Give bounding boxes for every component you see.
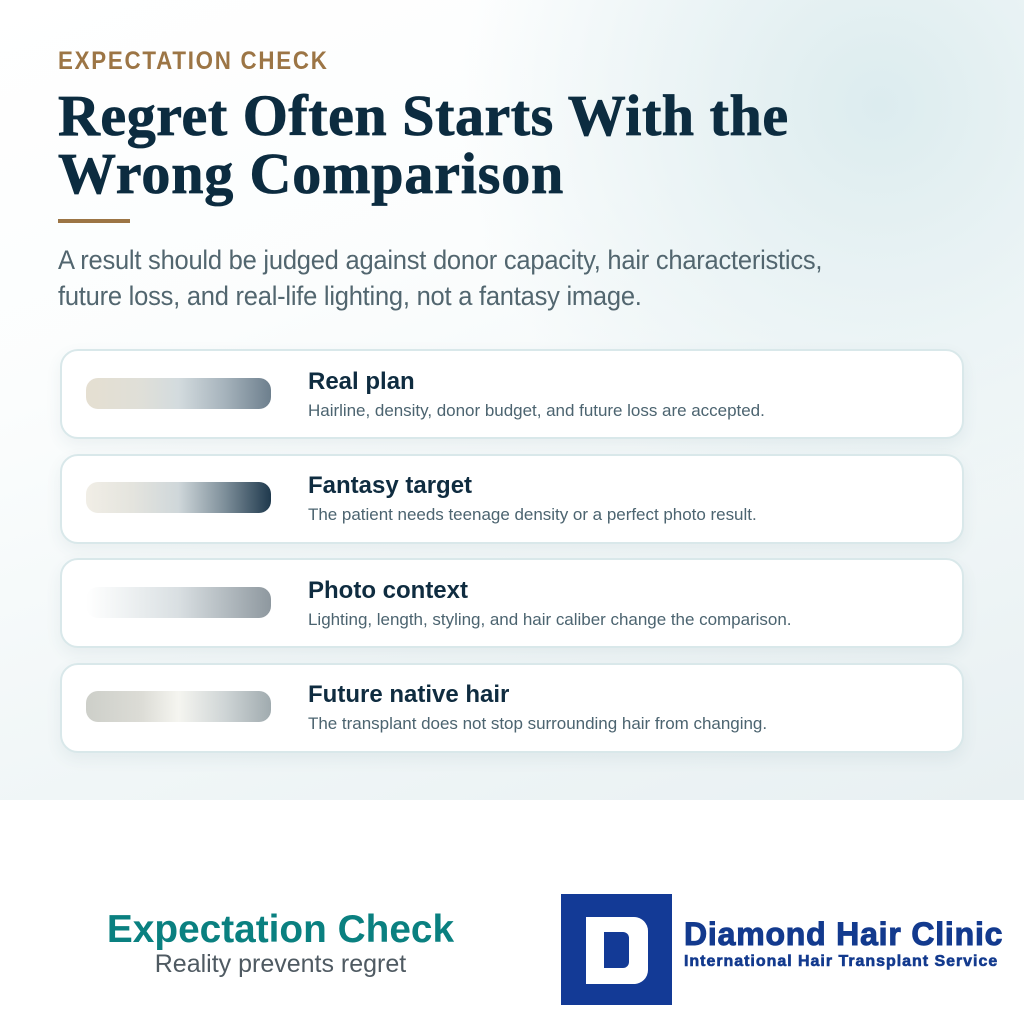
description: real plan: Hairline, density, donor budget, and future loss are accepted. <box>308 401 765 420</box>
title: Regret Often Starts With the <box>58 83 789 148</box>
gradient bar: future native hair <box>86 691 271 722</box>
title: Wrong Comparison <box>58 141 564 206</box>
heading: real plan: Real plan <box>308 368 415 395</box>
heading: future native hair: Future native hair <box>308 681 509 708</box>
title <box>58 83 789 206</box>
background panel <box>0 0 1024 800</box>
card: future native hair <box>60 663 964 753</box>
heading: fantasy target: Fantasy target <box>308 472 472 499</box>
description: photo context: Lighting, length, styling, and hair caliber change the comparison. <box>308 610 791 629</box>
gradient bar: fantasy target <box>86 482 271 513</box>
heading: photo context: Photo context <box>308 577 468 604</box>
title underline <box>58 219 130 223</box>
logo name: Diamond Hair Clinic <box>684 916 1003 952</box>
eyebrow label: EXPECTATION CHECK <box>58 47 329 75</box>
intro text: future loss, and real-life lighting, not a fantasy image. <box>58 281 642 311</box>
card: fantasy target <box>60 454 964 544</box>
card: photo context <box>60 558 964 648</box>
description: future native hair: The transplant does not stop surrounding hair from changing. <box>308 714 767 733</box>
gradient bar: photo context <box>86 587 271 618</box>
intro text <box>58 245 822 311</box>
footer heading: Expectation Check <box>107 908 454 951</box>
footer subheading: Reality prevents regret <box>155 950 406 978</box>
description: fantasy target: The patient needs teenage density or a perfect photo result. <box>308 505 757 524</box>
logo tagline: International Hair Transplant Service <box>684 953 998 970</box>
logo letter D <box>586 917 648 984</box>
card: real plan <box>60 349 964 439</box>
intro text: A result should be judged against donor capacity, hair characteristics, <box>58 245 822 275</box>
gradient bar: real plan <box>86 378 271 409</box>
logo mark <box>561 894 672 1005</box>
